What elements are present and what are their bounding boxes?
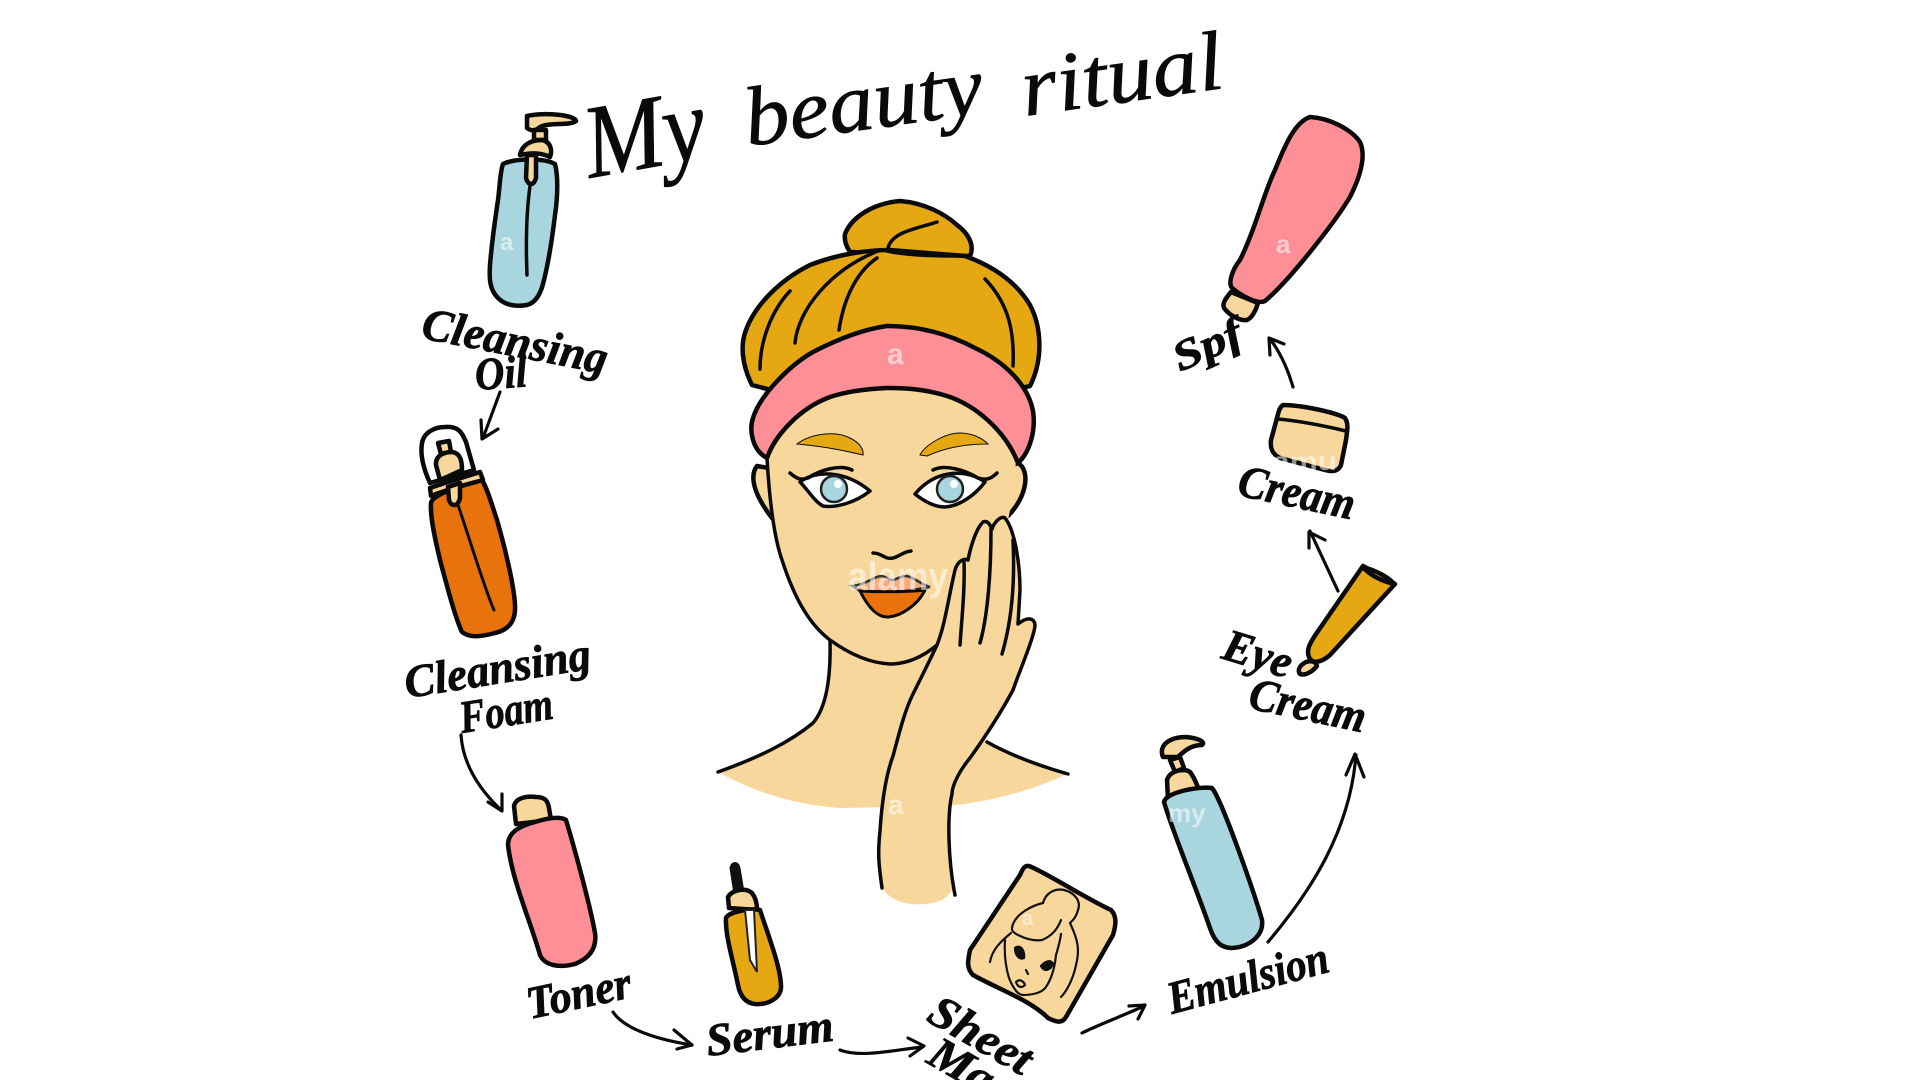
arrow: cream to spf [1269,338,1293,387]
label: eye cream: Eye [1216,619,1299,688]
title: ritual [1015,14,1229,135]
headband [751,326,1034,463]
label: eye cream [1216,619,1371,742]
face [767,378,1016,664]
label: sheet mask: Sheet [920,984,1044,1080]
product: eye cream tube [1299,566,1395,675]
label: cleansing foam: Foam [455,678,556,743]
arrow: sheet mask to emulsion [1082,1005,1145,1033]
shoulder outline [987,742,1068,774]
title: My [572,66,715,201]
product: cleansing oil bottle: a [500,229,514,256]
product: spf tube: a [1276,229,1291,259]
right ear [1000,463,1025,516]
watermarks on figure: a [888,789,904,820]
label: cleansing oil: Cleansing [418,298,612,384]
arrow: oil to foam [481,392,500,439]
hair [743,250,1039,395]
hand outline left [879,559,968,888]
nose [873,551,911,558]
watermarks on figure: a [887,338,904,371]
hand outline right [949,517,1035,895]
illustration: woman with headband touching her cheek [718,201,1068,904]
product: cleansing foam bottle [421,427,515,636]
shoulders and neck [718,640,1068,808]
mini face [990,890,1079,997]
product: cleansing oil bottle [490,114,576,306]
label: spf: Spf [1165,308,1254,381]
jaw outline [767,458,937,664]
neck outline [718,640,830,772]
label: emulsion: Emulsion [1161,932,1334,1024]
label: eye cream: Cream [1245,668,1371,742]
product: emulsion bottle [1162,737,1262,948]
left eye [790,468,870,506]
label: serum: Serum [703,1000,836,1066]
title [572,14,1229,201]
label: cream: Cream [1234,455,1360,529]
lips [852,576,930,617]
hair strands [760,222,1013,369]
label: cleansing foam: Cleansing [401,628,594,708]
arrow: foam to toner [461,735,502,811]
label: toner: Toner [521,957,637,1029]
bun [845,201,972,256]
product: emulsion bottle: my [1168,798,1206,828]
product: spf tube [1223,117,1363,320]
product: cream jar: amu [1272,446,1337,476]
product: cream jar [1271,405,1347,476]
right eye [915,468,997,507]
product: sheet mask [968,866,1115,1022]
hand [879,517,1035,904]
product: toner bottle [508,797,595,966]
left ear [753,466,780,518]
arrow: emulsion to eye cream [1268,754,1364,942]
arrow: toner to serum [613,1012,692,1049]
eyebrows [797,433,988,456]
arrow: serum to sheet mask [840,1038,924,1056]
product: sheet mask: a [1022,908,1034,930]
label: cleansing foam [401,628,594,743]
watermarks on figure: alamy [848,555,949,599]
watermarks on figure [848,338,949,820]
label: cleansing oil: Oil [473,345,529,400]
title: beauty [738,39,989,165]
product: serum dropper bottle [726,864,781,1004]
arrow: eye cream to cream [1309,531,1338,591]
fingers [960,529,1014,654]
